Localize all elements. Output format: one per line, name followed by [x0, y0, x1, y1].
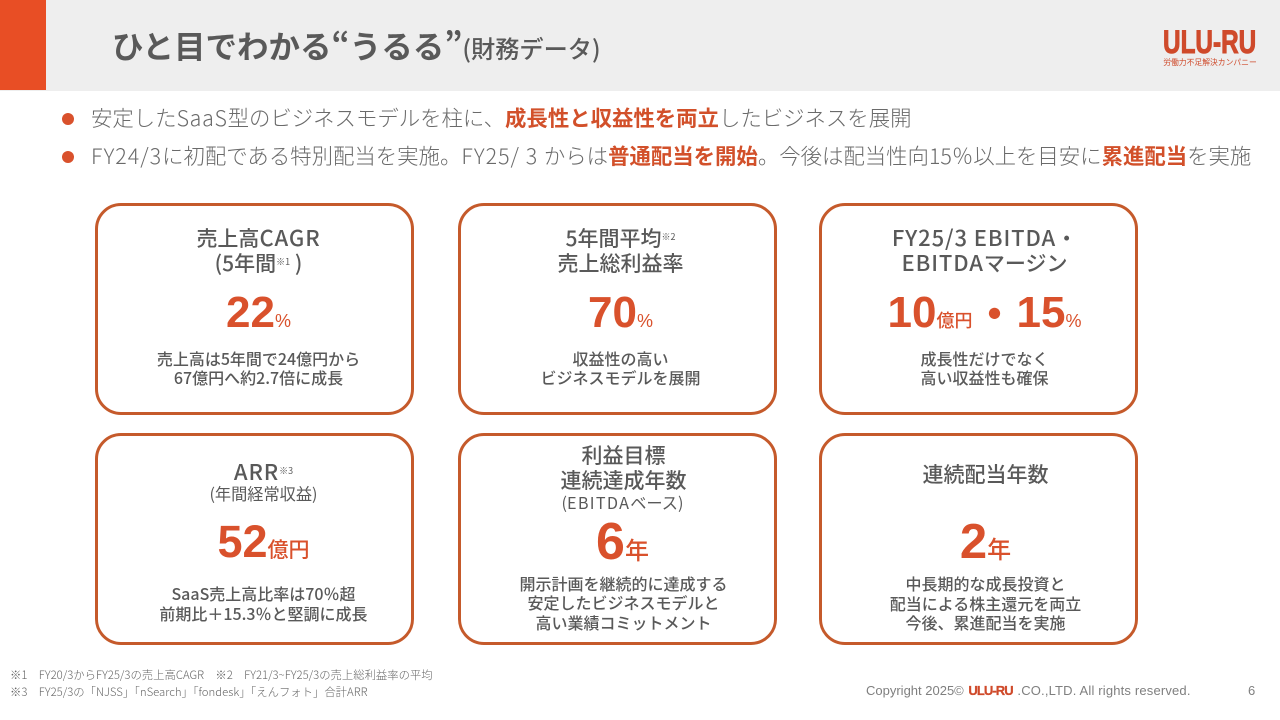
panel: 売上高CAGR [95, 203, 414, 415]
description: 配当による株主還元を両立 [890, 590, 1081, 614]
bullet 1 [62, 102, 911, 133]
panel: EBITDA [819, 203, 1138, 415]
metric: 70% [588, 288, 653, 337]
description [890, 571, 1081, 634]
description: 収益性の高い [572, 346, 668, 370]
description: ビジネスモデルを展開 [540, 365, 700, 389]
subheading: (EBITDAベース) [562, 490, 683, 514]
subheading: (年間経常収益) [209, 481, 318, 505]
heading: 5年間平均※2 [566, 223, 675, 253]
metric: 10億円・15% [888, 279, 1081, 343]
metric: 6年 [596, 513, 649, 571]
header band [0, 0, 1280, 91]
footnotes: ※1 FY20/3からFY25/3の売上高CAGR ※2 FY21/3~FY25/3の売上総利益率の平均 [10, 667, 433, 683]
bullet text: 安定したSaaS型のビジネスモデルを柱に、成長性と収益性を両立したビジネスを展開 [91, 102, 911, 133]
heading: 連続達成年数 [560, 465, 686, 495]
description: 売上高は5年間で24億円から [157, 346, 360, 370]
logo tagline: 労働力不足解決カンパニー [1163, 57, 1257, 68]
title: ひと目でわかる“うるる”(財務データ) [112, 22, 601, 68]
logo [1163, 24, 1257, 68]
heading [892, 221, 1077, 278]
heading: 売上高CAGR [196, 221, 321, 253]
panel: 売上総利益率 [458, 203, 777, 415]
panel: 連続配当年数 [819, 433, 1138, 645]
page number: 6 [1248, 683, 1255, 698]
copyright: Copyright 2025© ULU-RU .CO.,LTD. All rights reserved. [866, 683, 1191, 698]
metric: 2年 [960, 515, 1011, 569]
bullet dot [62, 151, 74, 163]
description [159, 581, 368, 624]
panel: ARR [95, 433, 414, 645]
description: 中長期的な成長投資と [905, 571, 1066, 595]
heading: FY25/3 EBITDA・ [892, 221, 1077, 253]
heading: (5年間※1 ) [215, 248, 302, 278]
header accent block [0, 0, 46, 90]
heading [196, 221, 321, 278]
description: 安定したビジネスモデルと [527, 590, 720, 614]
heading: 売上総利益率 [558, 248, 684, 278]
description [920, 346, 1048, 389]
description: 高い収益性も確保 [920, 365, 1048, 389]
logo wordmark: ULU-RU [1163, 24, 1256, 60]
description: 67億円へ約2.7倍に成長 [174, 365, 343, 389]
metric: 22% [226, 288, 291, 337]
description [519, 570, 728, 634]
description: 高い業績コミットメント [535, 610, 712, 634]
description: SaaS売上高比率は70％超 [171, 581, 356, 605]
heading [558, 223, 684, 278]
description: 成長性だけでなく [920, 346, 1048, 370]
bullet 2 [62, 140, 1251, 171]
description: 開示計画を継続的に達成する [519, 570, 728, 594]
heading: 利益目標 [582, 440, 666, 470]
heading: 連続配当年数 [922, 459, 1048, 489]
footnotes: ※3 FY25/3の「NJSS」「nSearch」「fondesk」「えんフォト」合計ARR [10, 684, 368, 700]
heading: EBITDAマージン [902, 246, 1067, 278]
heading: ARR※3 [234, 455, 293, 487]
bullet dot [62, 113, 74, 125]
footnotes [10, 667, 433, 700]
metric: 52億円 [217, 516, 310, 567]
bullet text: FY24/3に初配である特別配当を実施。FY25/ 3 からは普通配当を開始。今後は配当性向15％以上を目安に累進配当を実施 [91, 140, 1251, 171]
description: 前期比＋15.3％と堅調に成長 [159, 600, 368, 624]
heading [560, 440, 686, 495]
description [157, 346, 360, 389]
description [540, 346, 700, 389]
panel: 連続達成年数 [458, 433, 777, 645]
description: 今後、累進配当を実施 [905, 610, 1066, 634]
